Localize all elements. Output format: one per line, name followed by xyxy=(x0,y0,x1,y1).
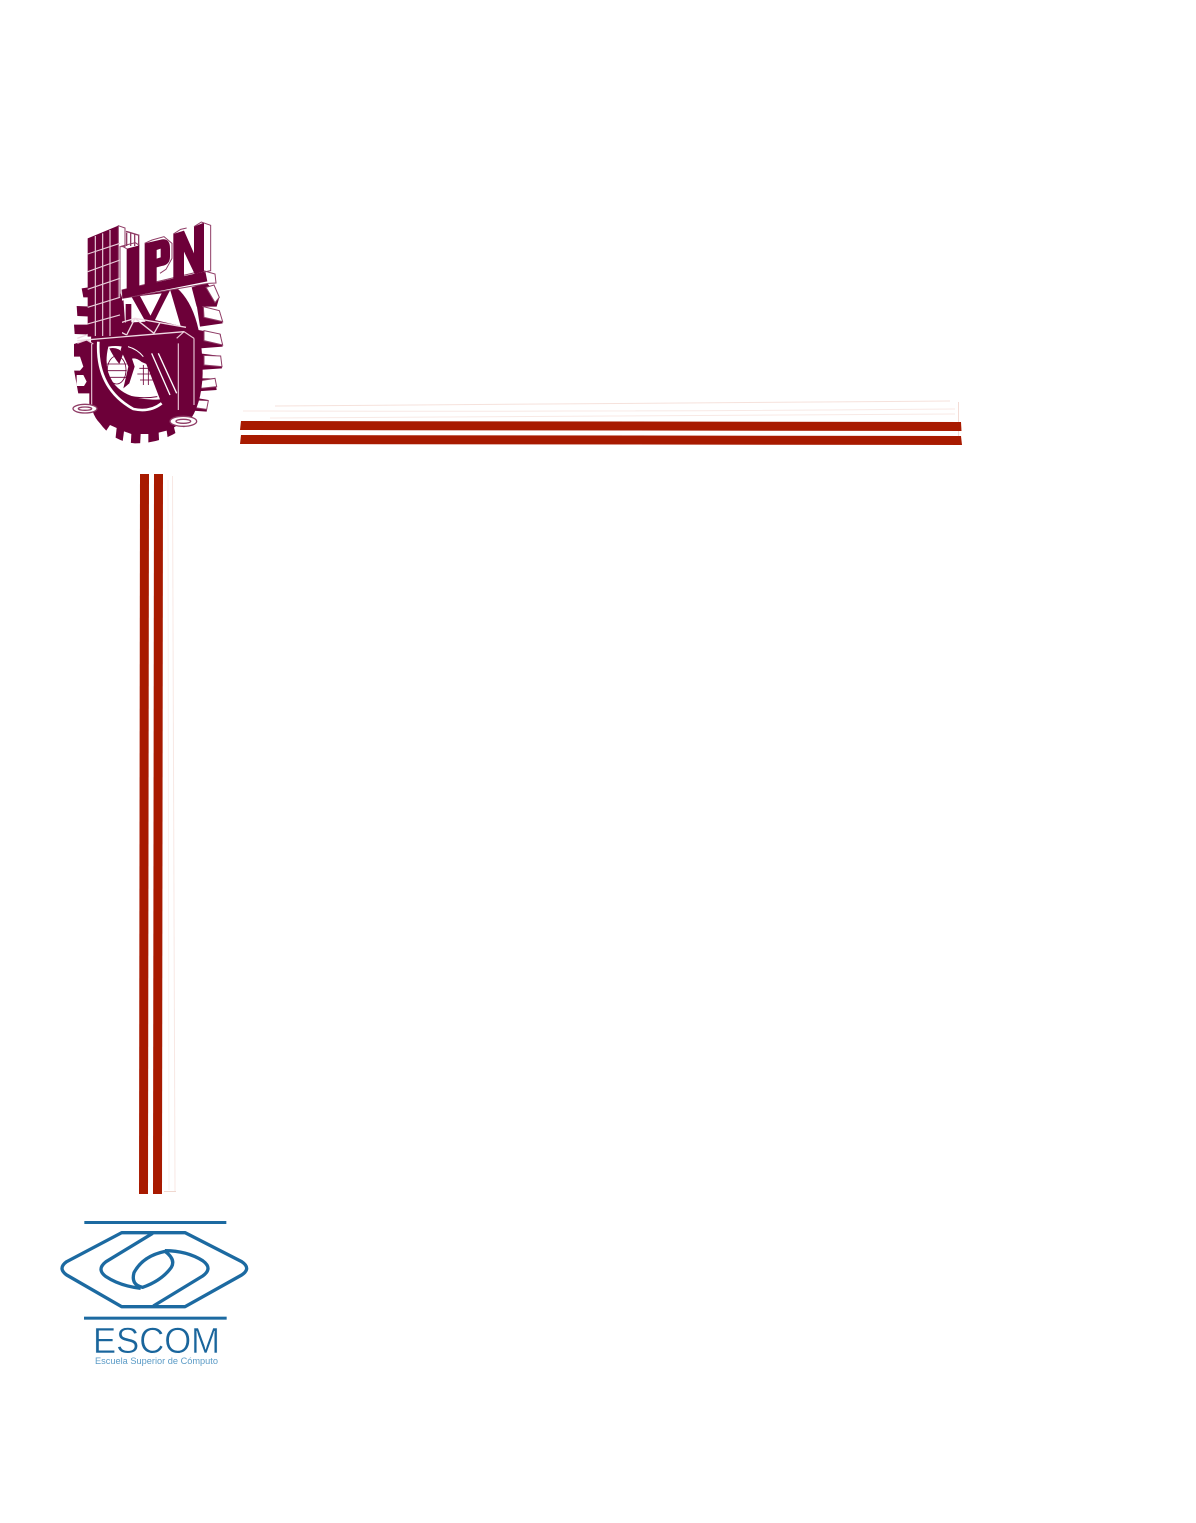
gear right teeth xyxy=(74,283,223,412)
torch xyxy=(126,304,131,325)
IPN plate and letters xyxy=(122,271,216,298)
hexagon mark xyxy=(62,1233,247,1307)
vertical double rule xyxy=(139,474,176,1194)
top rule xyxy=(84,1221,226,1224)
ESCOM tagline: Escuela Superior de Cómputo xyxy=(95,1356,218,1366)
horizontal double rule xyxy=(240,401,962,445)
beam lines xyxy=(152,353,177,395)
letter outlines xyxy=(122,222,211,273)
base rings xyxy=(73,404,197,426)
icon: IPN logo xyxy=(73,222,223,447)
gear disc xyxy=(90,285,203,443)
truss xyxy=(77,318,186,341)
column outlines xyxy=(77,332,194,410)
building xyxy=(88,226,122,337)
outer crescent line xyxy=(98,342,162,410)
upper openings xyxy=(123,289,181,326)
ESCOM wordmark: ESCOM xyxy=(93,1320,220,1361)
crossing beams xyxy=(134,289,167,327)
bottom rule xyxy=(84,1317,227,1320)
3D tooth faces xyxy=(193,285,223,409)
bottom tooth notches xyxy=(104,423,186,447)
icon: ESCOM logo xyxy=(62,1221,247,1320)
left column notches xyxy=(73,357,89,405)
eagle xyxy=(121,341,153,388)
inner white field xyxy=(107,346,160,400)
left column xyxy=(74,340,93,407)
globe xyxy=(105,356,157,398)
